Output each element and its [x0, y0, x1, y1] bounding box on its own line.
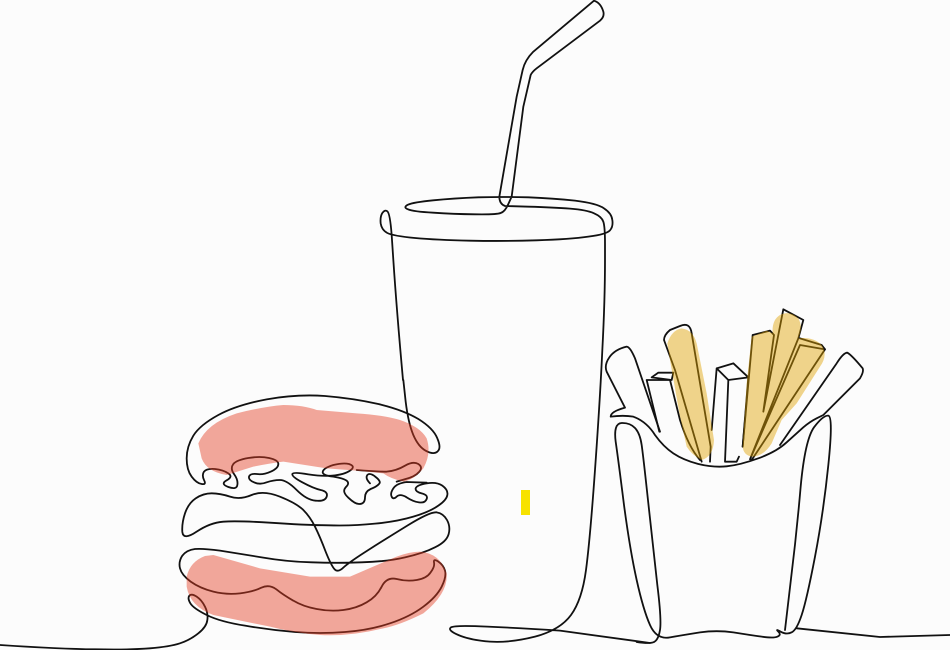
right fries colour wash	[743, 313, 825, 457]
fries carton with fries	[606, 309, 950, 643]
burger outline	[0, 380, 449, 650]
bottom bun colour wash	[187, 552, 447, 635]
top bun colour wash	[198, 405, 429, 482]
drink cup with straw	[381, 1, 650, 643]
yellow marker	[521, 490, 530, 515]
left fry colour wash	[667, 328, 714, 460]
carton and fries outlines	[606, 309, 950, 643]
burger	[0, 380, 449, 650]
